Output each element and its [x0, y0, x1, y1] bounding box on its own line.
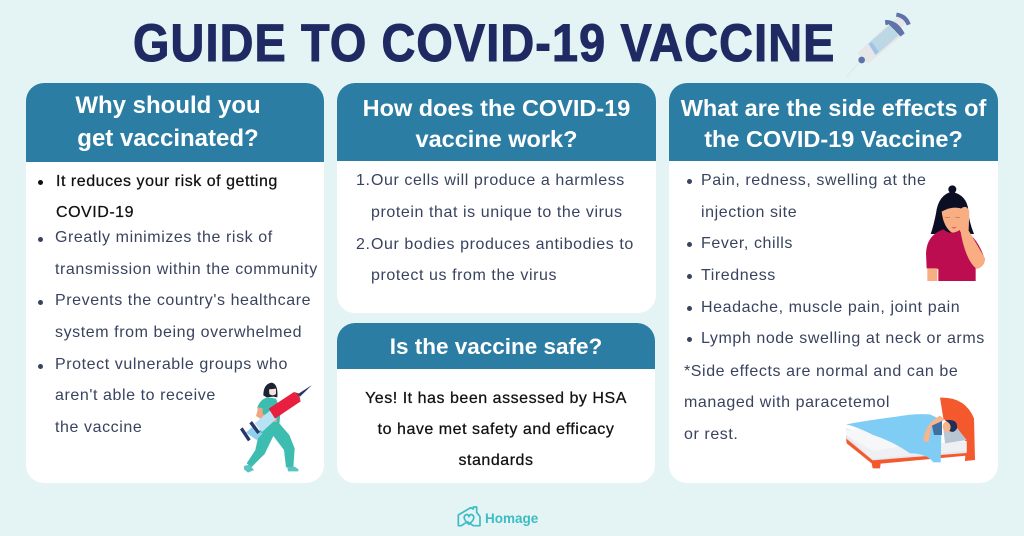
bullet list: reasons: Prevents the country's healthcare — [55, 292, 311, 309]
numbered list: how it works: Our bodies produces antibodies to — [371, 236, 634, 253]
bullet list: reasons: Greatly minimizes the risk of — [55, 229, 273, 246]
bullet list: side effects: or rest. — [684, 426, 738, 443]
heading: side effects: the COVID-19 Vaccine? — [704, 126, 963, 152]
bullet list: reasons: aren't able to receive — [55, 387, 216, 404]
heading: why: get vaccinated? — [77, 125, 259, 152]
numbered list: how it works: 2. — [356, 236, 371, 253]
bullet list: side effects: Lymph node swelling at neck or arms — [701, 330, 985, 347]
text: safety answer: Yes! It has been assessed by HSA — [365, 390, 627, 407]
bullet list: side effects: managed with paracetemol — [684, 394, 890, 411]
icon: person resting in bed — [846, 398, 975, 468]
heading: how: vaccine work? — [416, 126, 577, 152]
text: safety answer — [365, 390, 627, 469]
bullet list: side effects: Headache, muscle pain, joint pain — [701, 299, 960, 316]
icon: nurse with giant syringe — [240, 382, 312, 473]
bullet list: reasons: It reduces your risk of getting — [56, 173, 278, 190]
wordmark: Homage — [485, 511, 538, 526]
bullet list: reasons: transmission within the community — [55, 261, 318, 278]
bullet list: side effects — [684, 172, 985, 443]
icon: woman with headache — [926, 185, 985, 281]
bullet list: reasons: system from being overwhelmed — [55, 324, 302, 341]
panel: side effects — [669, 83, 998, 483]
text: safety answer: to have met safety and efficacy — [378, 421, 614, 438]
numbered list: how it works: Our cells will produce a harmless — [371, 172, 625, 189]
logo: Homage — [458, 506, 538, 526]
heading: safe — [337, 323, 655, 369]
numbered list: how it works — [356, 172, 634, 284]
numbered list: how it works: protect us from the virus — [371, 267, 557, 284]
panel: is vaccine safe — [337, 323, 655, 483]
bullet list: reasons — [38, 173, 318, 436]
bullet list: reasons: COVID-19 — [56, 204, 134, 221]
heading: side effects: What are the side effects of — [681, 95, 986, 121]
heading: why: Why should you — [75, 92, 261, 119]
bullet list: side effects: injection site — [701, 204, 797, 221]
icon: syringe — [846, 12, 911, 76]
numbered list: how it works: protein that is unique to the virus — [371, 204, 623, 221]
heading: why — [26, 83, 324, 162]
heading: how — [337, 83, 656, 161]
text: safety answer: standards — [458, 452, 534, 469]
bullet list: side effects: Pain, redness, swelling at the — [701, 172, 927, 189]
bullet list: reasons: the vaccine — [55, 419, 142, 436]
title: GUIDE TO COVID-19 VACCINE — [133, 14, 835, 72]
icon: house with heart — [458, 506, 481, 526]
bullet list: side effects: Tiredness — [701, 267, 776, 284]
heading: safe: Is the vaccine safe? — [390, 334, 602, 359]
panel: why get vaccinated — [26, 83, 324, 483]
heading: how: How does the COVID-19 — [363, 95, 630, 121]
heading: side effects — [669, 83, 998, 161]
bullet list: side effects: Fever, chills — [701, 235, 793, 252]
bullet list: side effects: *Side effects are normal and can be — [684, 363, 958, 380]
bullet list: reasons: Protect vulnerable groups who — [55, 356, 288, 373]
panel: how vaccine works — [337, 83, 656, 313]
numbered list: how it works: 1. — [356, 172, 371, 189]
